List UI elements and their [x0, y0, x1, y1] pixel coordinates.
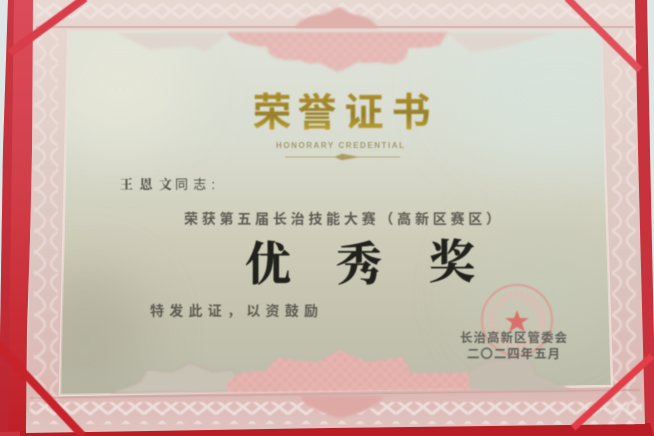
- encouragement line: 特发此证，以资鼓励: [150, 303, 318, 319]
- award name: 奖: [429, 237, 475, 288]
- award description: 荣获第五届长治技能大赛（高新区赛区）: [184, 211, 500, 227]
- ribbon: bottom left: [0, 345, 83, 436]
- certificate title: 证: [344, 92, 384, 135]
- border guilloche: top: [36, 1, 634, 23]
- certificate title: 荣: [252, 92, 292, 135]
- border guilloche: left: [34, 30, 58, 400]
- recipient name: [120, 177, 215, 192]
- certificate title: 书: [391, 92, 431, 135]
- ribbon: bottom right: [573, 356, 652, 428]
- ribbon: top right: [567, 0, 640, 70]
- certificate title: [252, 92, 431, 135]
- award name: 优: [245, 239, 291, 290]
- title ornament: [285, 154, 400, 160]
- issue date: 二〇二四年五月: [467, 346, 560, 361]
- seal star: [505, 310, 529, 332]
- certificate title: 誉: [297, 92, 337, 135]
- english subtitle: HONORARY CREDENTIAL: [276, 141, 404, 150]
- border guilloche: bottom: [30, 402, 642, 424]
- recipient name: 王恩文: [120, 177, 172, 192]
- top rosette: [117, 7, 555, 72]
- bottom rosette: [110, 350, 570, 418]
- red seal: [482, 285, 552, 355]
- recipient name: 同志:: [175, 177, 215, 192]
- award name: [245, 237, 475, 290]
- ribbon: top left: [10, 0, 85, 53]
- border guilloche: right: [612, 30, 636, 420]
- award name: 秀: [336, 239, 382, 290]
- inner certificate panel: [58, 30, 614, 396]
- issuing organisation: 长治高新区管委会: [460, 330, 567, 345]
